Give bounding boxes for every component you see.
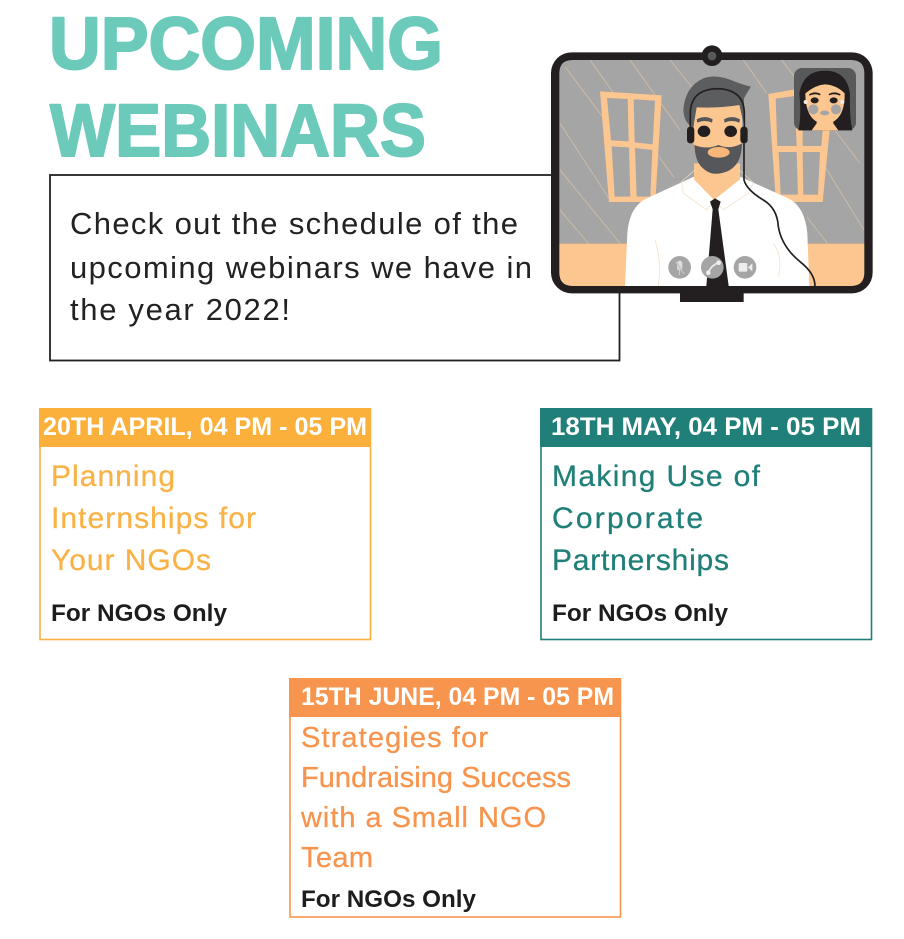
eyes <box>809 92 841 103</box>
title: WEBINARS <box>50 89 426 172</box>
screen floor <box>559 243 864 286</box>
title: UPCOMING <box>49 2 443 85</box>
headset <box>687 89 815 286</box>
illustration: video call on monitor <box>551 45 873 302</box>
collar lines <box>655 170 780 286</box>
mouth <box>708 147 730 158</box>
cheeks <box>808 104 841 114</box>
call buttons <box>668 256 756 279</box>
beard <box>694 143 742 174</box>
right window <box>768 89 830 202</box>
card title: Partnerships <box>552 544 729 577</box>
card title: Making Use of <box>552 460 761 493</box>
card audience: For NGOs Only <box>51 600 228 627</box>
card audience: For NGOs Only <box>552 600 729 627</box>
intro text box: the year 2022! <box>70 292 290 327</box>
intro text box <box>50 175 620 360</box>
hair <box>798 71 852 130</box>
neck and shoulders <box>812 113 838 130</box>
card title: Corporate <box>552 502 703 535</box>
hair <box>683 76 751 127</box>
tie <box>706 198 729 286</box>
card title: with a Small NGO <box>300 802 546 834</box>
man <box>625 76 815 286</box>
card header <box>540 408 872 447</box>
card title: Strategies for <box>301 722 488 754</box>
intro text box: upcoming webinars we have in <box>70 250 532 285</box>
wall light stripes <box>560 60 864 243</box>
card date: 15TH JUNE, 04 PM - 05 PM <box>301 683 614 711</box>
woman thumbnail <box>794 68 856 130</box>
title <box>49 2 443 172</box>
card title <box>552 460 761 577</box>
eyebrows <box>697 117 740 123</box>
left window <box>600 91 662 202</box>
lips <box>820 111 829 115</box>
monitor stand <box>680 287 744 302</box>
screen wall <box>559 60 864 243</box>
card title: Fundraising Success <box>301 762 571 794</box>
monitor frame <box>551 52 873 293</box>
webcam <box>702 45 722 66</box>
card: 20th April <box>39 408 371 640</box>
card title <box>51 460 256 577</box>
card: 15th June <box>289 678 621 917</box>
intro text box: Check out the schedule of the <box>70 206 518 241</box>
card title: Your NGOs <box>51 544 211 577</box>
card header <box>39 408 371 447</box>
earphones <box>804 100 844 104</box>
card header <box>289 678 621 717</box>
card audience: For NGOs Only <box>301 886 477 913</box>
shirt <box>625 177 809 286</box>
card title: Internships for <box>51 502 256 535</box>
hang up button <box>701 256 724 279</box>
neck <box>694 163 740 200</box>
card title: Team <box>301 842 373 874</box>
card date: 18TH MAY, 04 PM - 05 PM <box>551 413 861 441</box>
card title <box>300 722 571 874</box>
card: 18th May <box>540 408 872 640</box>
card title: Planning <box>51 460 175 493</box>
face <box>694 103 742 172</box>
card date: 20TH APRIL, 04 PM - 05 PM <box>43 413 367 441</box>
eyes <box>698 126 737 137</box>
camera button <box>734 256 756 279</box>
mute button <box>668 256 691 279</box>
face <box>805 84 845 124</box>
ears <box>688 130 747 143</box>
